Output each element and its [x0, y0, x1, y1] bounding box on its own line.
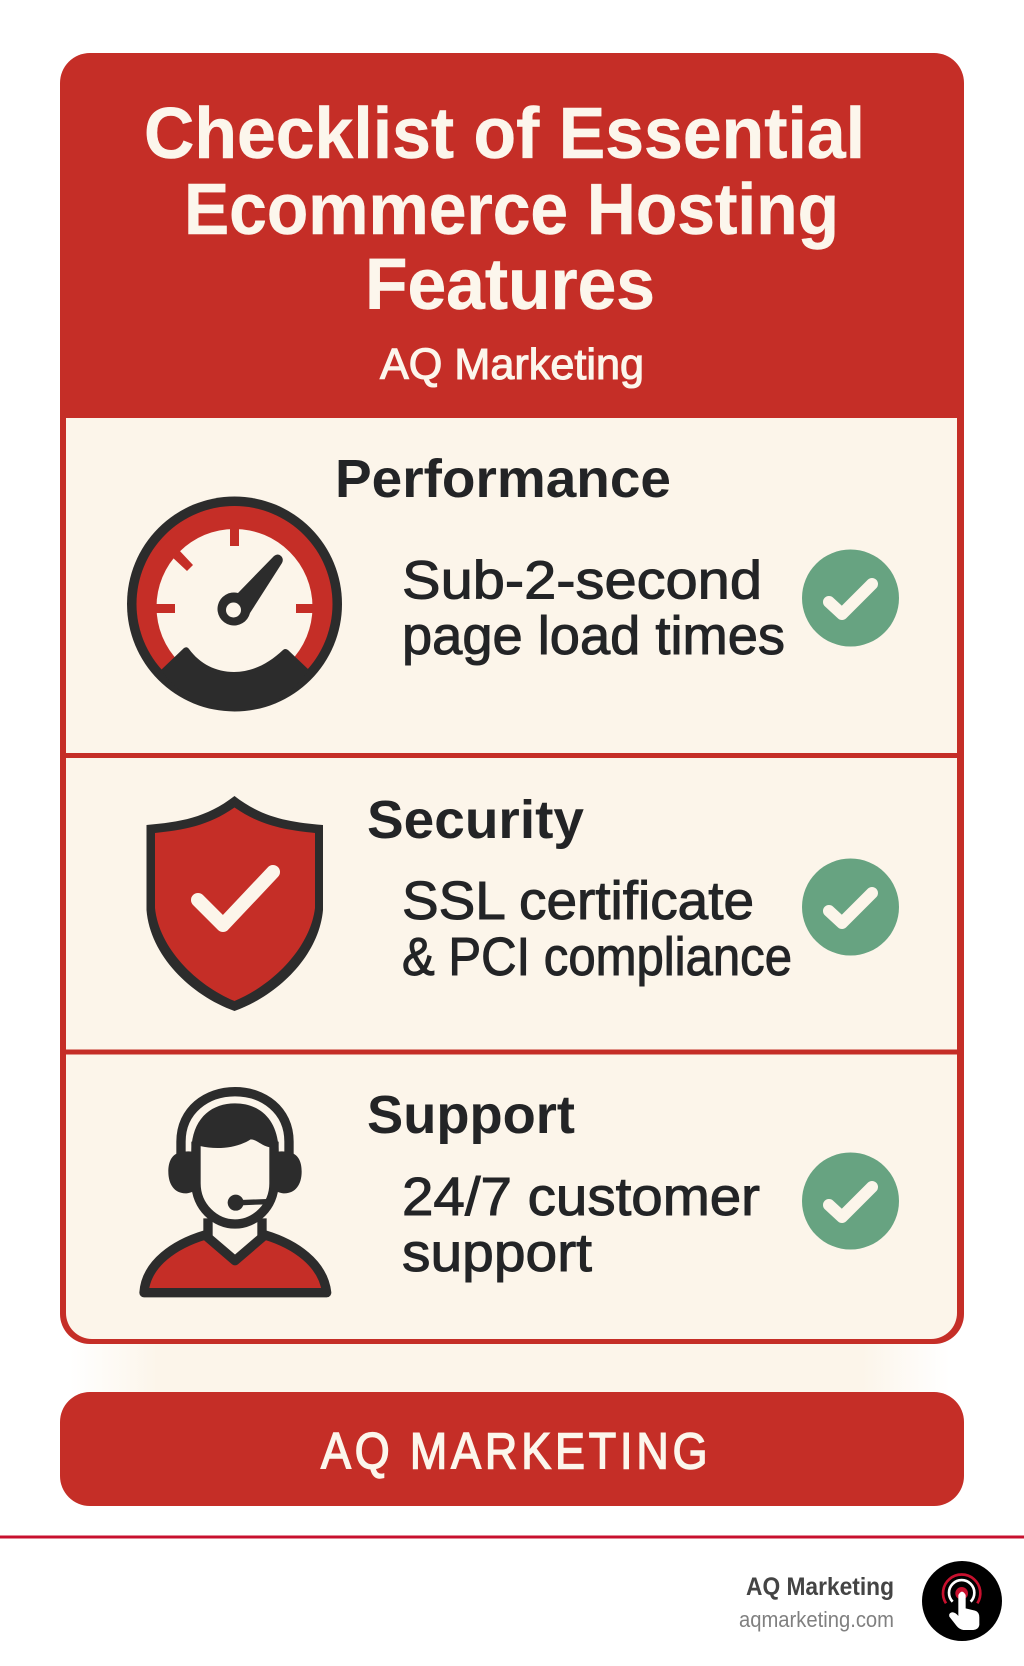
text: page load times [402, 550, 785, 666]
footer brand text [739, 1573, 894, 1632]
text: ssl and pci: SSL certificate [402, 871, 754, 931]
divider: security and support [66, 1050, 957, 1054]
panel: support [144, 1085, 899, 1293]
banner: aq marketing [60, 1392, 964, 1506]
icon: green check [802, 858, 899, 956]
subtitle: AQ Marketing [380, 340, 644, 389]
icon: support agent [144, 1092, 327, 1293]
icon: green check [802, 550, 899, 646]
icon: green check [802, 1152, 899, 1250]
heading: security: Security [367, 790, 584, 850]
text: ssl and pci: & PCI compliance [402, 927, 792, 987]
panel background: cream body [66, 418, 957, 1339]
title [144, 94, 865, 325]
heading: support: Support [367, 1085, 575, 1145]
panel: main card [60, 53, 964, 1344]
text: customer support: support [402, 1223, 592, 1283]
text: customer support [402, 1167, 760, 1283]
banner: aq marketing: AQ MARKETING [321, 1424, 711, 1480]
icon: speedometer [127, 496, 342, 712]
text: ssl and pci [402, 871, 792, 987]
divider: performance and security [66, 753, 957, 758]
icon: shield [146, 796, 323, 1011]
text: page load times: page load times [402, 606, 785, 666]
heading: performance: Performance [335, 449, 671, 509]
panel: performance [127, 449, 899, 712]
footer brand text: AQ Marketing [746, 1573, 894, 1601]
footer rule [0, 1536, 1024, 1538]
title: Features [365, 245, 655, 325]
icon: footer logo [922, 1561, 1002, 1641]
title: Ecommerce Hosting [184, 170, 839, 250]
title: Checklist of Essential [144, 94, 865, 174]
panel: security [146, 790, 899, 1011]
footer brand text: aqmarketing.com [739, 1607, 894, 1632]
text: customer support: 24/7 customer [402, 1167, 760, 1227]
text: page load times: Sub-2-second [402, 550, 762, 610]
soft glow between card and banner [70, 1344, 950, 1394]
